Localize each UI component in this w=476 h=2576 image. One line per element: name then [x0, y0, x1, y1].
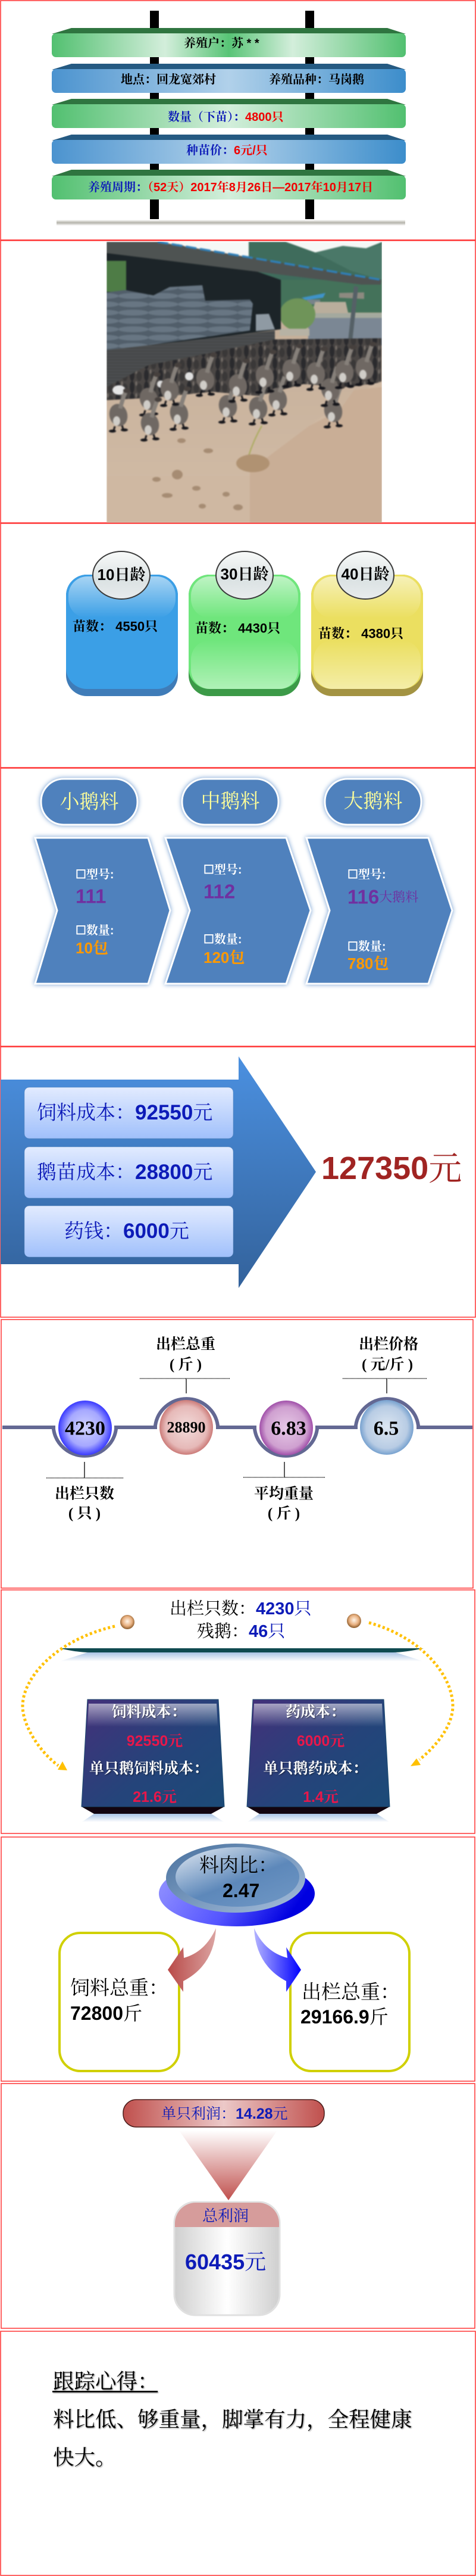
column: medium goose feed: 120包: [203, 949, 245, 966]
button: ratio: [159, 1844, 315, 1926]
cost box: medicine: 药钱：6000元: [64, 1220, 189, 1242]
funnel triangle: [179, 2131, 277, 2200]
banner: quantity: [52, 99, 406, 128]
column: medium goose feed: ☐型号:: [203, 863, 242, 877]
banner: quantity: 数量（下苗）：4800只: [168, 110, 284, 124]
photo: geese in front of feed shed: [107, 242, 382, 523]
box: feed cost: 21.6元: [133, 1789, 177, 1805]
banner: location and breed: 地点：回龙宽郊村: [121, 72, 216, 86]
cost box: medicine: [24, 1206, 233, 1257]
box: total output weight: 29166.9斤: [300, 2006, 389, 2028]
box: total output weight: 出栏总重：: [302, 1981, 400, 2003]
panel: feed conversion ratio: [1, 1837, 475, 2081]
stat: average weight: ( 斤 ): [268, 1505, 300, 1522]
card: 10 day age: [66, 551, 178, 696]
banner: farming period: [52, 170, 406, 199]
stat: average weight: 平均重量: [254, 1485, 314, 1502]
panel: farm info banner stack: [1, 1, 475, 240]
column: medium goose feed: [165, 779, 311, 984]
stat: total weight: [140, 1335, 230, 1455]
base shadow: [57, 220, 405, 226]
panel: feed types: [1, 768, 475, 1046]
box: medicine cost: 6000元: [297, 1733, 345, 1749]
arrow: to output weight: [254, 1928, 301, 1992]
card: 10 day age: 苗数： 4550只: [73, 619, 158, 634]
arrow: cost flow: [1, 1056, 316, 1288]
card: 30 day age: 30日龄: [221, 565, 268, 583]
arrow: right dotted arc: [369, 1623, 453, 1766]
pill: profit per bird: [123, 2100, 324, 2127]
stat: birds out: 出栏只数: [55, 1485, 114, 1502]
arrow: to feed weight: [168, 1928, 216, 1992]
icon: left bead: [120, 1615, 134, 1629]
panel: profit: [1, 2084, 475, 2328]
banner: farmer: [52, 28, 406, 57]
column: small goose feed: ☐型号:: [76, 868, 114, 881]
stat: birds out: 4230: [65, 1417, 105, 1440]
banner: farming period: 养殖周期：（52天）2017年8月26日—2017年10月17日: [88, 180, 373, 194]
text: notes body: 快大。: [53, 2446, 117, 2469]
stat: sale price: 出栏价格: [359, 1335, 418, 1353]
column: large goose feed: 大鹅料: [344, 790, 402, 812]
box: total feed weight: 72800斤: [70, 2003, 142, 2024]
card: 40 day age: 40日龄: [342, 565, 389, 583]
box: total output weight: [290, 1933, 409, 2071]
stat: sale price: [343, 1335, 427, 1455]
box: medicine cost: 1.4元: [303, 1789, 339, 1805]
column: large goose feed: [306, 779, 452, 984]
column: medium goose feed: 112: [203, 880, 235, 903]
column: small goose feed: ☐数量:: [76, 924, 114, 937]
card: 40 day age: [311, 551, 423, 696]
banner: farmer: 养殖户：苏 * *: [184, 36, 259, 50]
banner: chick price: 种苗价：6元/只: [186, 143, 268, 157]
column: small goose feed: 小鹅料: [60, 791, 119, 812]
stat: birds out: [46, 1401, 123, 1522]
panel: slaughter stats timeline: [1, 1320, 473, 1588]
box: total feed weight: 饲料总重：: [70, 1977, 168, 1998]
heading: birds out and losses: [170, 1599, 312, 1641]
box: feed cost: 饲料成本：: [111, 1704, 186, 1720]
stat: sale price: 6.5: [374, 1417, 399, 1440]
timeline wave: [2, 1399, 472, 1456]
box: feed cost: 92550元: [127, 1733, 183, 1749]
panel: chick count by age: [1, 523, 475, 768]
box: medicine cost: [247, 1699, 390, 1822]
cost box: feed: [24, 1087, 233, 1139]
icon: right bead: [347, 1614, 361, 1628]
text: notes body: 料比低、够重量，脚掌有力，全程健康: [53, 2407, 412, 2431]
panel: per-bird costs: [1, 1590, 475, 1833]
panel: photo of geese at farm: [1, 241, 475, 523]
box: total feed weight: [60, 1933, 179, 2071]
icon: support posts: [150, 11, 314, 219]
card: 30 day age: 苗数： 4430只: [195, 620, 281, 636]
jar: total profit: 总利润: [202, 2207, 249, 2225]
banner: location and breed: 养殖品种：马岗鹅: [269, 73, 364, 86]
cost box: goslings: 鹅苗成本：28800元: [37, 1160, 212, 1184]
stat: total weight: 28890: [167, 1418, 206, 1436]
box: medicine cost: 单只鹅药成本：: [263, 1760, 368, 1777]
panel: total cost: [1, 1047, 475, 1317]
banner: location and breed: [52, 64, 406, 93]
column: small goose feed: [35, 779, 170, 984]
jar: total profit: [174, 2202, 280, 2315]
cost box: goslings: [24, 1147, 233, 1198]
column: large goose feed: ☐数量:: [347, 940, 386, 953]
pill: profit per bird: 单只利润：14.28元: [161, 2106, 288, 2122]
column: small goose feed: 111: [76, 885, 106, 907]
arrow: left dotted arc: [23, 1626, 115, 1770]
button: ratio: 2.47: [223, 1880, 259, 1901]
column: large goose feed: ☐型号:: [347, 868, 386, 881]
card: 30 day age: [189, 551, 300, 696]
column: medium goose feed: ☐数量:: [203, 933, 242, 946]
text: notes body: [53, 2407, 412, 2469]
stat: sale price: ( 元/斤 ): [362, 1356, 413, 1373]
heading: notes: 跟踪心得：: [53, 2369, 159, 2393]
box: feed cost: [82, 1699, 224, 1822]
cost box: feed: 饲料成本：92550元: [37, 1100, 212, 1124]
total cost value: 127350元: [321, 1149, 462, 1187]
box: feed cost: 单只鹅饲料成本：: [89, 1760, 208, 1777]
column: large goose feed: 116大鹅料: [347, 886, 418, 907]
stat: average weight: 6.83: [271, 1417, 306, 1440]
stat: average weight: [243, 1401, 325, 1522]
card: 10 day age: 10日龄: [98, 566, 145, 584]
heading: birds out and losses: 残鹅：46只: [197, 1621, 285, 1641]
plate: [60, 1648, 424, 1661]
box: medicine cost: 药成本：: [286, 1704, 345, 1720]
jar: total profit: 60435元: [185, 2250, 266, 2274]
card: 40 day age: 苗数： 4380只: [318, 626, 404, 641]
stat: total weight: 出栏总重: [156, 1335, 215, 1353]
stat: birds out: ( 只 ): [68, 1505, 101, 1522]
button: ratio: 料肉比：: [199, 1854, 278, 1876]
column: large goose feed: 780包: [347, 955, 389, 972]
banner: chick price: [52, 135, 406, 164]
column: medium goose feed: 中鹅料: [201, 790, 259, 812]
stat: total weight: ( 斤 ): [170, 1356, 202, 1373]
column: small goose feed: 10包: [76, 939, 108, 957]
panel: tracking notes: [1, 2331, 475, 2575]
heading: birds out and losses: 出栏只数：4230只: [170, 1599, 312, 1618]
